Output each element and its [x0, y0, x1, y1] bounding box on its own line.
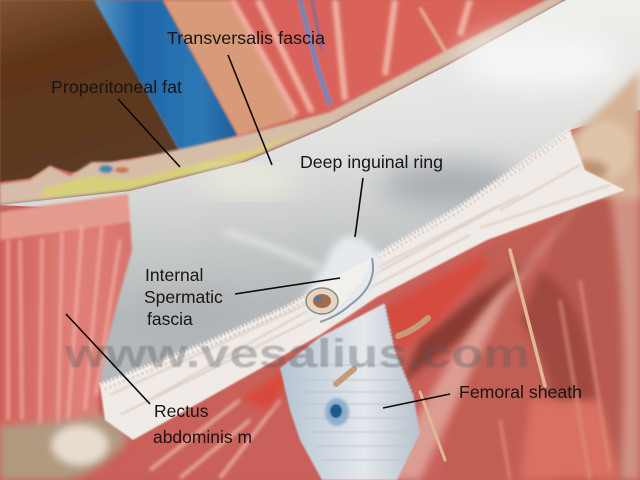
- right tan attachment tissue: [560, 70, 640, 200]
- label: Properitoneal fat: [51, 77, 182, 167]
- label: Rectus abdominis m: Rectus: [154, 401, 209, 421]
- label: Femoral sheath: Femoral sheath: [459, 382, 582, 402]
- watermark: www.vesalius.com: [64, 332, 530, 376]
- label: Transversalis fascia: Transversalis fascia: [167, 28, 325, 48]
- inguinal ligament: [100, 130, 625, 440]
- pubic tubercle tissue: [0, 415, 126, 480]
- label: Internal Spermatic fascia: [144, 265, 340, 329]
- label: Transversalis fascia: [167, 28, 325, 165]
- label: Femoral sheath: [383, 382, 582, 408]
- label: Internal Spermatic fascia: fascia: [147, 309, 193, 329]
- peritoneal cavity: brown region: [0, 0, 180, 182]
- fat band: [0, 0, 566, 205]
- femoral sheath: [280, 303, 420, 480]
- upper red abdominal wall muscle: [228, 0, 556, 118]
- blue external iliac vein: [94, 0, 238, 152]
- label: Internal Spermatic fascia: Spermatic: [144, 287, 223, 307]
- label: Rectus abdominis m: abdominis m: [153, 427, 252, 447]
- tan psoas muscle: [163, 0, 296, 136]
- label: Internal Spermatic fascia: Internal: [145, 265, 203, 285]
- small vessels and nerves: [336, 250, 545, 460]
- label: Deep inguinal ring: Deep inguinal ring: [300, 152, 443, 172]
- label: Rectus abdominis m: [66, 314, 252, 447]
- label: Properitoneal fat: Properitoneal fat: [51, 77, 182, 97]
- rectus abdominis muscle: [0, 194, 132, 440]
- label: Deep inguinal ring: [300, 152, 443, 237]
- deep inguinal ring and spermatic cord: [306, 236, 382, 322]
